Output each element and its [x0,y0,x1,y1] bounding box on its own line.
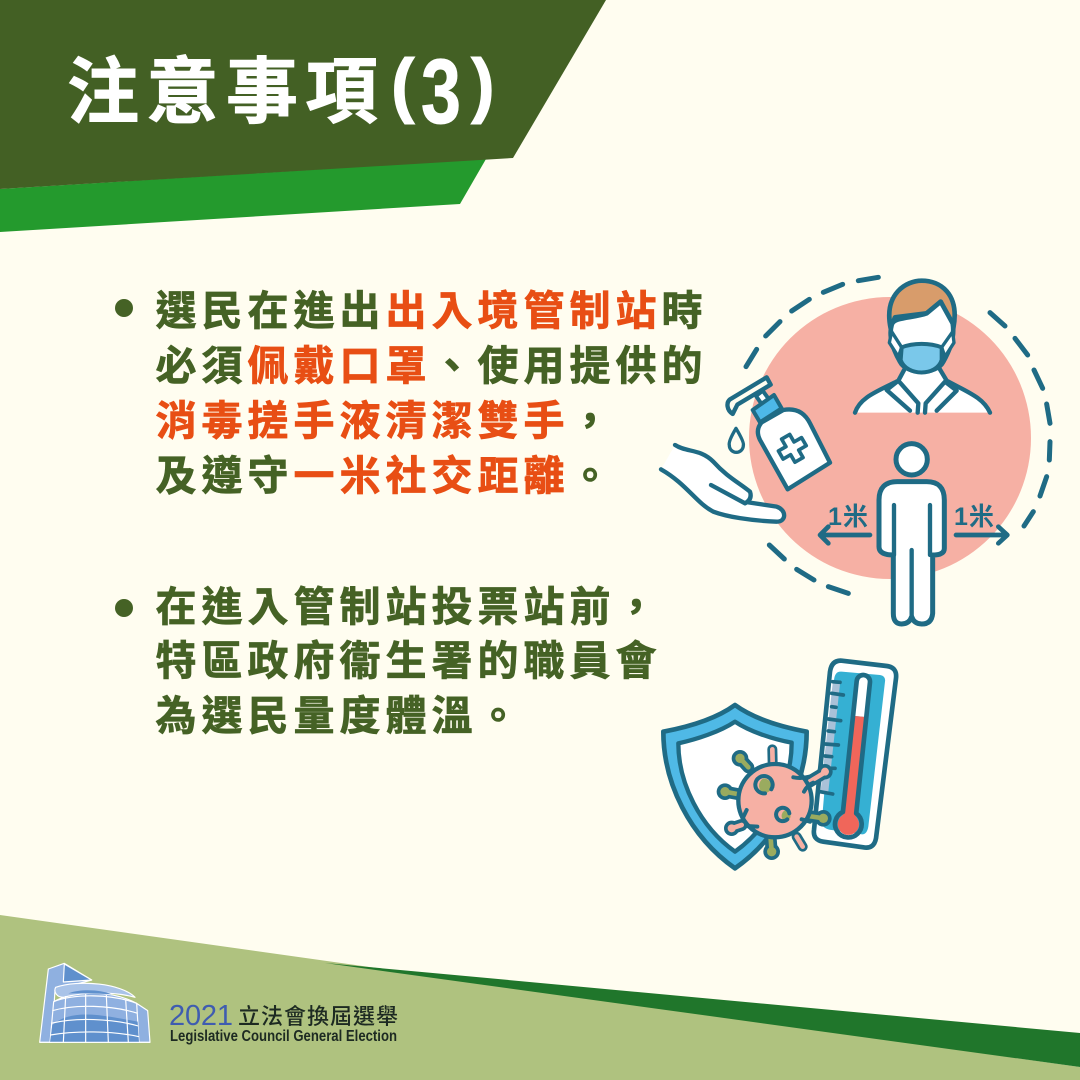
text block: hygiene rules: 消毒搓手液清潔雙手， [156,398,616,444]
header banner [0,0,606,232]
bullet 2 marker [115,599,133,617]
text block: hygiene rules: 選民在進出出入境管制站時 [156,288,708,334]
logo: legislative council building [40,963,150,1042]
footer band [0,915,1080,1080]
icon: thermometer [814,661,896,848]
arrows: one metre left and right [820,527,1007,543]
icon: virus [717,749,833,860]
icon: sanitizer bottle [727,377,830,489]
text block: temperature check: 特區政府衞生署的職員會 [156,638,662,684]
icon: masked man [855,281,990,413]
logo text: 2021 election [169,1000,399,1045]
logo text: 2021 election: Legislative Council General Election [170,1028,397,1045]
bullet 1 marker [115,299,133,317]
title: ( [391,46,415,125]
text block: temperature check [156,584,662,739]
text block: hygiene rules: 及遵守一米社交距離。 [156,453,616,499]
title: ) [471,46,495,125]
icon: standing figure [879,444,944,624]
illustration: thermometer and virus shield [663,661,896,868]
label: 1 metre left: 1米 [828,503,869,531]
dashed ring [746,277,1050,593]
icon: open hand [661,445,784,522]
label: 1 metre right: 1米 [954,503,995,531]
text block: hygiene rules [156,288,708,499]
logo text: 2021 election: 2021 [169,1000,233,1032]
text block: temperature check: 為選民量度體溫。 [156,693,524,739]
icon: shield [663,705,807,868]
title [67,40,495,143]
illustration: hygiene and distancing [661,277,1050,624]
title: 3 [421,40,461,143]
text block: temperature check: 在進入管制站投票站前， [156,584,662,630]
text block: hygiene rules: 必須佩戴口罩、使用提供的 [156,343,708,389]
pink circle [749,297,1031,579]
logo text: 2021 election: 立法會換屆選舉 [238,1004,399,1029]
title: 注意事項 [67,53,385,133]
